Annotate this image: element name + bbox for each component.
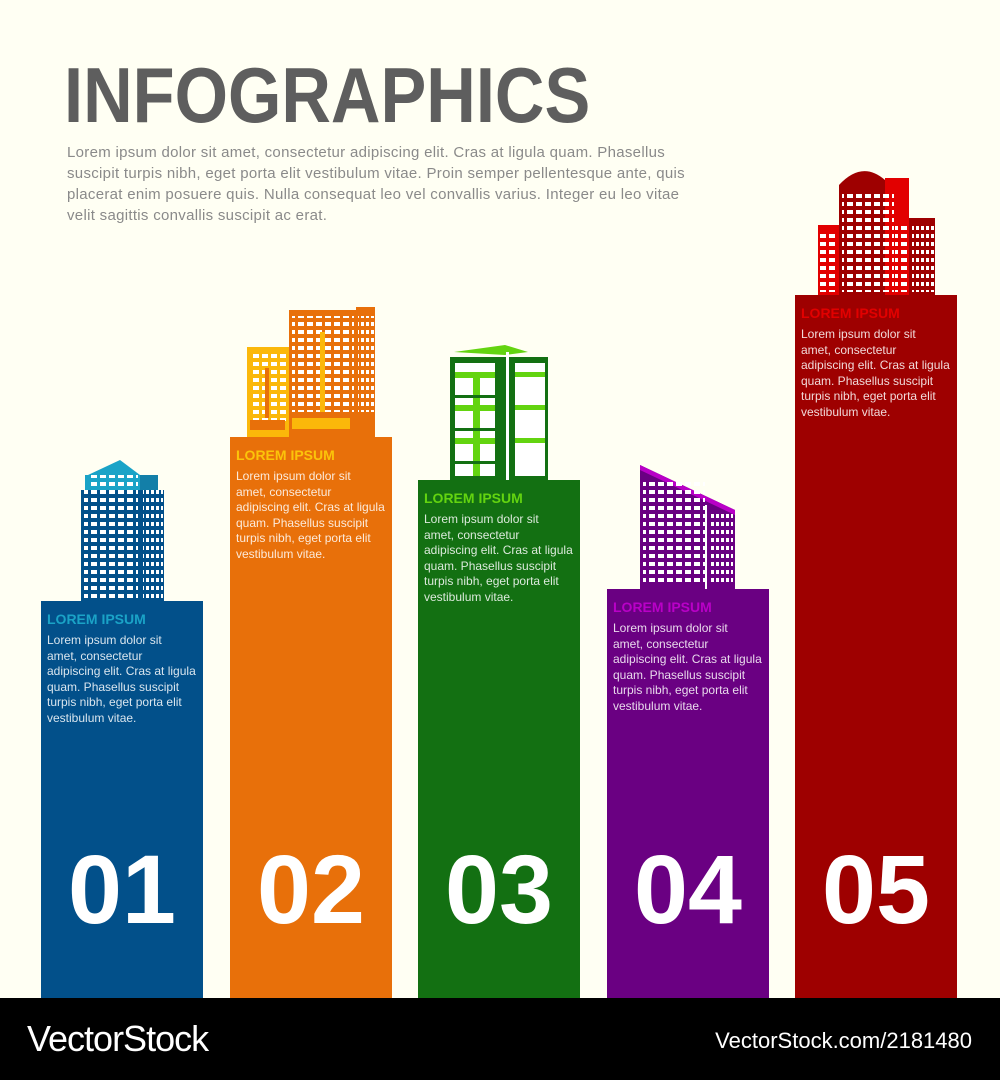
intro text: velit sagittis convallis suscipit ac erat. bbox=[67, 207, 327, 224]
text 02: amet, consectetur bbox=[236, 484, 331, 498]
text 01: amet, consectetur bbox=[47, 648, 142, 662]
footer bbox=[0, 998, 1000, 1080]
intro text bbox=[67, 144, 685, 224]
panel: 01 bbox=[41, 601, 203, 998]
intro text: Lorem ipsum dolor sit amet, consectetur adipiscing elit. Cras at ligula quam. Phasellus bbox=[67, 144, 665, 161]
text 05: Lorem ipsum dolor sit bbox=[801, 327, 916, 341]
icon: blue building bbox=[81, 460, 164, 601]
text 03 bbox=[424, 512, 573, 604]
text 04: quam. Phasellus suscipit bbox=[613, 668, 745, 682]
text 02: turpis nibh, eget porta elit bbox=[236, 531, 371, 545]
text 05: turpis nibh, eget porta elit bbox=[801, 389, 936, 403]
text 02 bbox=[236, 469, 385, 560]
number 02: 02 bbox=[257, 835, 365, 944]
number 05: 05 bbox=[822, 835, 930, 944]
heading 02: LOREM IPSUM bbox=[236, 447, 335, 463]
heading 01: LOREM IPSUM bbox=[47, 611, 146, 627]
text 03: vestibulum vitae. bbox=[424, 590, 513, 604]
panel: 03 bbox=[418, 480, 580, 998]
text 01: turpis nibh, eget porta elit bbox=[47, 695, 182, 709]
text 04: turpis nibh, eget porta elit bbox=[613, 683, 748, 697]
icon: red building bbox=[818, 171, 935, 295]
text 01: Lorem ipsum dolor sit bbox=[47, 633, 162, 647]
text 01 bbox=[47, 633, 196, 724]
text 04: vestibulum vitae. bbox=[613, 698, 702, 712]
text 02: Lorem ipsum dolor sit bbox=[236, 469, 351, 483]
icon: orange buildings bbox=[247, 307, 375, 437]
heading 03: LOREM IPSUM bbox=[424, 490, 523, 506]
text 03: quam. Phasellus suscipit bbox=[424, 558, 556, 572]
text 01: quam. Phasellus suscipit bbox=[47, 680, 179, 694]
number 04: 04 bbox=[634, 835, 742, 944]
panel: 04 bbox=[607, 589, 769, 998]
text 05 bbox=[801, 327, 950, 418]
text 03: adipiscing elit. Cras at ligula bbox=[424, 543, 573, 557]
heading 04: LOREM IPSUM bbox=[613, 599, 712, 615]
footer id: VectorStock.com/2181480 bbox=[715, 1028, 972, 1053]
number 01: 01 bbox=[68, 835, 176, 944]
text 02: quam. Phasellus suscipit bbox=[236, 516, 368, 530]
text 05: adipiscing elit. Cras at ligula bbox=[801, 358, 950, 372]
number 03: 03 bbox=[445, 835, 553, 944]
text 02: vestibulum vitae. bbox=[236, 546, 325, 560]
text 02: adipiscing elit. Cras at ligula bbox=[236, 500, 385, 514]
footer logo: VectorStock bbox=[27, 1018, 208, 1059]
panel: 05 bbox=[795, 295, 957, 998]
icon: purple building bbox=[640, 465, 735, 589]
text 01: vestibulum vitae. bbox=[47, 710, 136, 724]
text 01: adipiscing elit. Cras at ligula bbox=[47, 664, 196, 678]
text 05: quam. Phasellus suscipit bbox=[801, 374, 933, 388]
text 04: adipiscing elit. Cras at ligula bbox=[613, 652, 762, 666]
intro text: placerat enim posuere quis. Nulla consequat leo vel convallis varius. Integer eu leo vitae bbox=[67, 186, 679, 203]
intro text: suscipit turpis nibh, eget porta elit vestibulum vitae. Proin semper pellentesque ante, quis bbox=[67, 165, 685, 182]
text 03: amet, consectetur bbox=[424, 528, 519, 542]
text 03: turpis nibh, eget porta elit bbox=[424, 574, 559, 588]
title: INFOGRAPHICS bbox=[64, 51, 590, 139]
heading 05: LOREM IPSUM bbox=[801, 305, 900, 321]
text 04 bbox=[613, 621, 762, 712]
text 05: amet, consectetur bbox=[801, 342, 896, 356]
icon: green building bbox=[450, 345, 548, 480]
panel: 02 bbox=[230, 437, 392, 998]
text 04: Lorem ipsum dolor sit bbox=[613, 621, 728, 635]
text 03: Lorem ipsum dolor sit bbox=[424, 512, 539, 526]
text 04: amet, consectetur bbox=[613, 636, 708, 650]
text 05: vestibulum vitae. bbox=[801, 404, 890, 418]
